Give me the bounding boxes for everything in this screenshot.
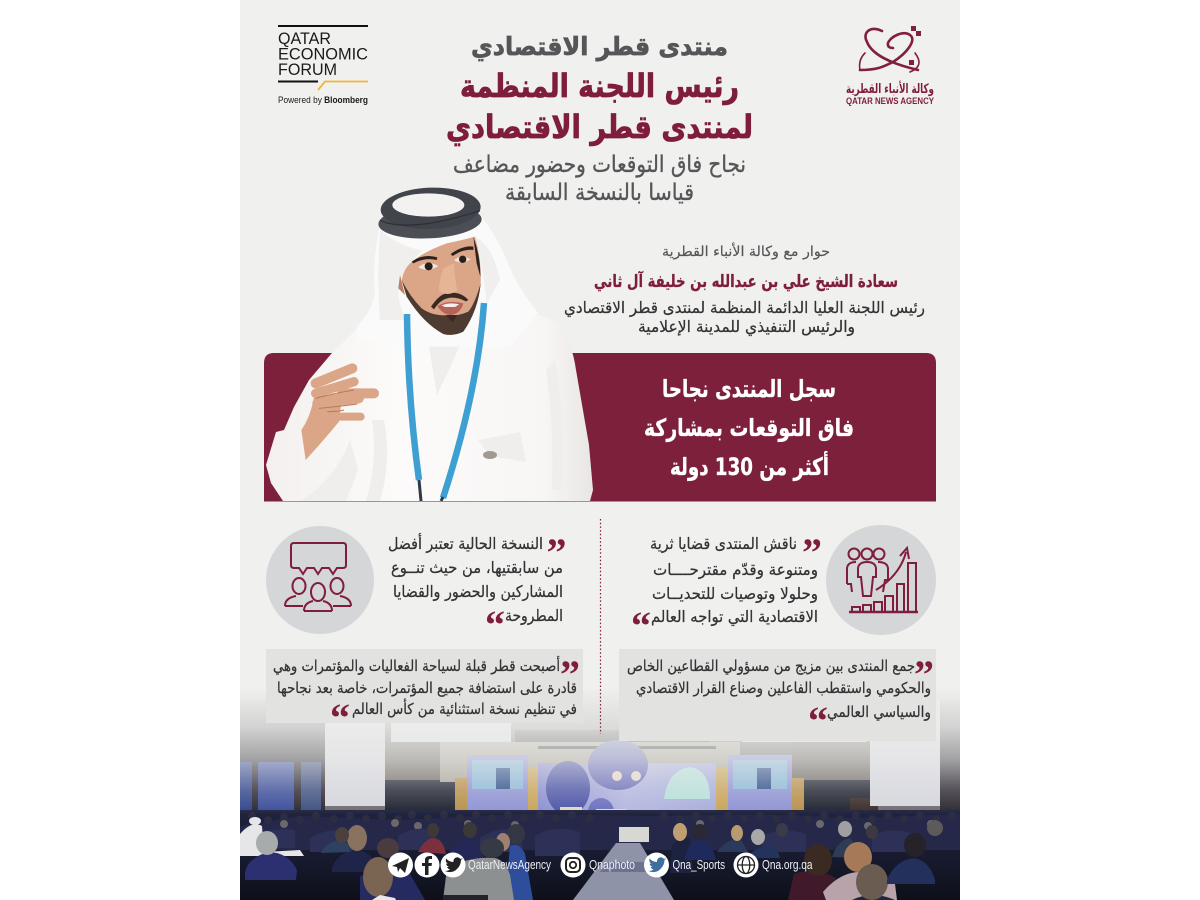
quote block: discussed rich issues: ناقش المنتدى قضايا ثرية: [650, 534, 797, 554]
logo: Qatar Economic Forum: ECONOMIC: [278, 44, 368, 64]
headline line 1: رئيس اللجنة المنظمة: [460, 67, 739, 105]
interview intro: حوار مع وكالة الأنباء القطرية: [662, 242, 830, 260]
logo: Qatar News Agency: [846, 26, 934, 106]
handle: website: Qna.org.qa: [762, 857, 813, 872]
quote mark close: “: [485, 602, 505, 647]
callout: public and private sectors: والحكومي واستقطب الفاعلين وصناع القرار الاقتصادي: [636, 679, 931, 698]
icon: twitter sports: [644, 852, 669, 878]
grey haired man: [245, 852, 297, 880]
row men left: [332, 850, 374, 872]
woman: [788, 871, 838, 900]
callout: public and private sectors: والسياسي العالمي: [827, 703, 931, 722]
handle: QatarNewsAgency: QatarNewsAgency: [468, 857, 551, 872]
callout: Qatar events tourism: [266, 649, 583, 740]
row men right: [670, 838, 693, 873]
icon: instagram: [560, 852, 586, 878]
quote mark open: ”: [914, 652, 934, 697]
brows and eyes: [412, 246, 473, 270]
icon: globe: [734, 852, 758, 878]
icon: twitter: [440, 852, 466, 878]
icon: discussion group: [266, 526, 374, 634]
subtitle line 1: نجاح فاق التوقعات وحضور مضاعف: [453, 152, 746, 178]
goatee: [446, 315, 457, 323]
blue suit man: [505, 845, 533, 900]
handle: Qna_Sports: Qna_Sports: [672, 857, 725, 872]
egal: [378, 202, 482, 241]
quote mark open: ”: [546, 530, 566, 575]
headline line 2: لمنتدى قطر الاقتصادي: [446, 108, 753, 146]
portrait of the speaker: [266, 186, 593, 501]
logo: Qatar Economic Forum: FORUM: [278, 60, 337, 79]
front head: [852, 896, 895, 900]
quote block: best edition: المطروحة: [505, 606, 563, 626]
mouth: [437, 302, 463, 315]
beard: [402, 280, 481, 335]
quote block: best edition: النسخة الحالية تعتبر أفضل: [388, 533, 543, 554]
quote block: discussed rich issues: وحلولا وتوصيات للتحديــات: [652, 584, 818, 604]
divider: dotted: [600, 519, 602, 734]
right suit: [887, 858, 935, 884]
banner text: سجل المنتدى نجاحا: [662, 375, 836, 403]
guest role: [564, 298, 925, 337]
aisle seats and carpet: [619, 827, 649, 842]
quote mark open: ”: [802, 530, 822, 575]
logo: Qatar News Agency: وكالة الأنباء القطرية: [846, 80, 934, 97]
callout: Qatar events tourism: قادرة على استضافة جميع المؤتمرات، خاصة بعد نجاحها: [277, 679, 577, 697]
overline: forum name: منتدى قطر الاقتصادي: [471, 32, 728, 62]
hand and arm: [301, 368, 374, 460]
panel: headline banner: [264, 353, 936, 502]
callout: public and private sectors: جمع المنتدى بين مزيج من مسؤولي القطاعين الخاص: [627, 657, 915, 676]
lanyard: [407, 303, 484, 498]
white robed delegate: [240, 824, 304, 856]
plaid shirt man: [418, 838, 446, 854]
quote mark close: “: [808, 698, 828, 743]
guest role: رئيس اللجنة العليا الدائمة المنظمة لمنتدى قطر الاقتصادي: [564, 298, 925, 318]
quote block: discussed rich issues: [631, 530, 822, 648]
headdress: [357, 217, 538, 347]
quote block: discussed rich issues: الاقتصادية التي تواجه العالم: [651, 607, 818, 627]
quote mark close: “: [631, 603, 651, 648]
nose: [439, 263, 457, 294]
subtitle line 2: قياسا بالنسخة السابقة: [505, 180, 694, 206]
banner text: أكثر من 130 دولة: [670, 451, 829, 481]
face: [402, 237, 481, 335]
photo: conference hall: [240, 690, 960, 900]
quote mark open: ”: [560, 652, 580, 697]
logo: Qatar Economic Forum: QATAR: [278, 29, 331, 48]
distant crowd: [240, 811, 960, 856]
front audience: [240, 817, 943, 900]
icon: facebook: [414, 852, 440, 878]
logo: Qatar Economic Forum: [278, 25, 368, 106]
robe folds: [300, 340, 563, 501]
handle: Qnaphoto: Qnaphoto: [589, 857, 635, 872]
icon: telegram: [388, 852, 413, 878]
lanyard clip: [419, 480, 443, 501]
banner text: فاق التوقعات بمشاركة: [644, 414, 854, 442]
quote block: best edition: [388, 530, 566, 647]
robe: [266, 300, 593, 501]
quote block: best edition: المشاركين والحضور والقضايا: [393, 582, 563, 602]
pen pin: [483, 451, 497, 459]
icon: growth and people: [826, 525, 936, 635]
quote block: best edition: من سابقتيها، من حيث تنــوع: [391, 558, 563, 578]
guest role: والرئيس التنفيذي للمدينة الإعلامية: [638, 317, 855, 337]
moustache: [431, 293, 468, 309]
banner text: [644, 375, 854, 481]
callout: Qatar events tourism: أصبحت قطر قبلة لسياحة الفعاليات والمؤتمرات وهي: [273, 656, 560, 676]
logo: Qatar Economic Forum: Powered by Bloomberg: [278, 95, 368, 106]
quote mark close: “: [330, 695, 350, 740]
callout: public and private sectors: [619, 649, 936, 743]
head: [357, 186, 538, 347]
logo: Qatar News Agency: QATAR NEWS AGENCY: [846, 96, 934, 106]
bald man: [823, 872, 897, 900]
social media bar: [388, 852, 813, 878]
grey jacket man: [443, 858, 514, 900]
paper background: [240, 0, 960, 900]
quote block: discussed rich issues: ومتنوعة وقدّم مقترحــــات: [653, 560, 818, 580]
guest name: سعادة الشيخ علي بن عبدالله بن خليفة آل ثاني: [594, 270, 898, 292]
callout: Qatar events tourism: في تنظيم نسخة استثنائية من كأس العالم: [352, 698, 577, 719]
title: [446, 32, 753, 206]
